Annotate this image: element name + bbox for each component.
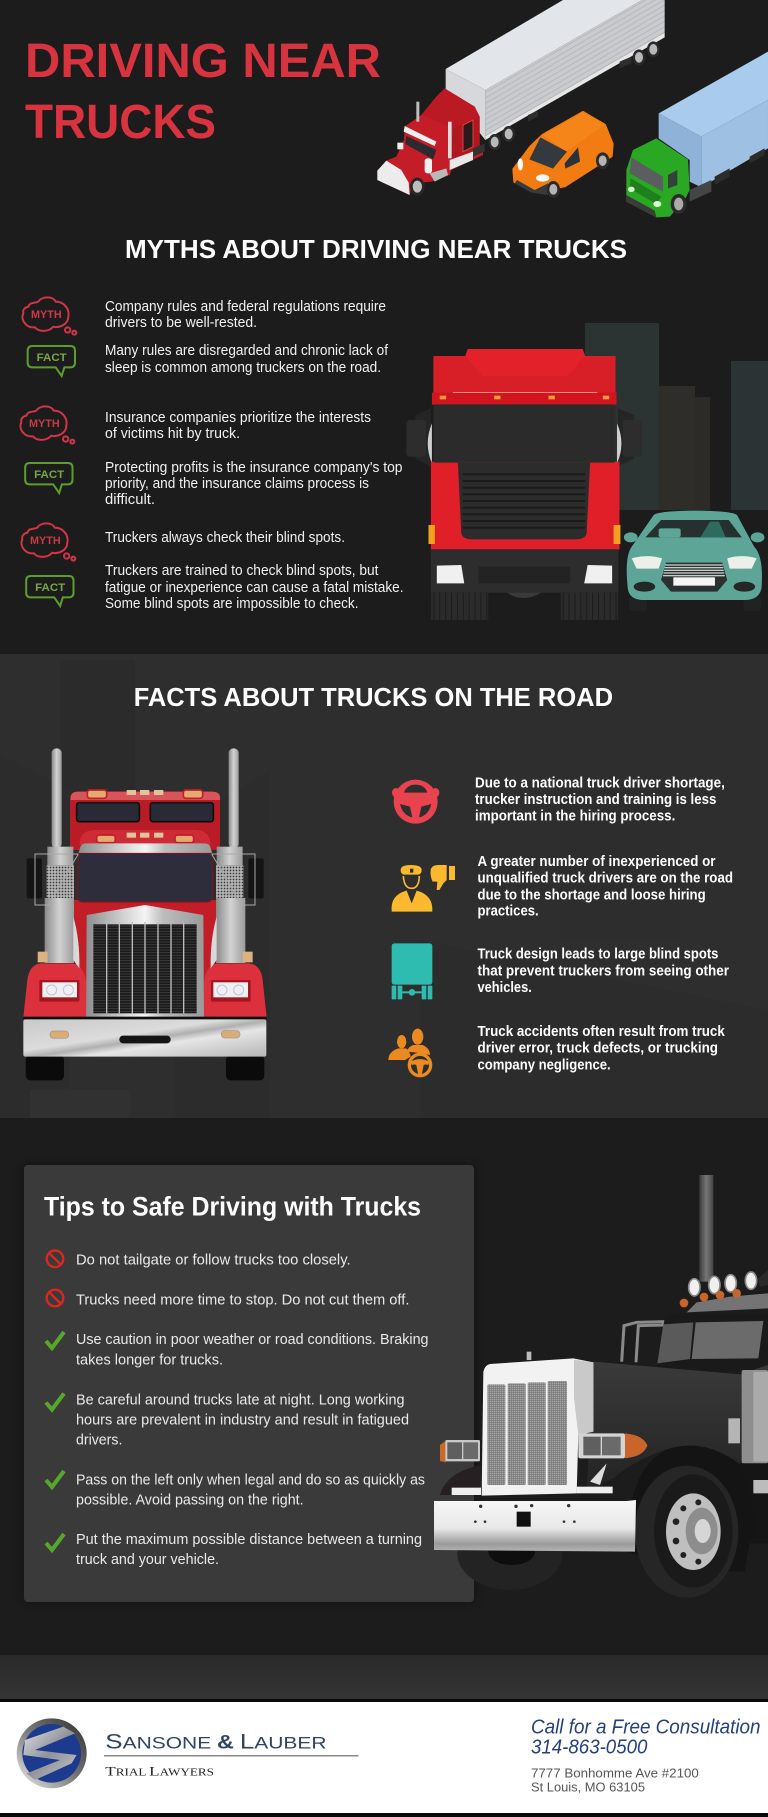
white trailer: [446, 0, 665, 150]
fact 1 text: Many rules are disregarded and chronic lack of: [105, 343, 389, 359]
myth icon 2: MYTH: [29, 418, 60, 430]
firm tagline: TRIAL LAWYERS: [105, 1763, 214, 1778]
fact text 1: [475, 775, 725, 825]
fact icon 3: FACT: [35, 582, 65, 594]
firm name: SANSONE & LAUBER: [105, 1730, 327, 1753]
icon: people and steering wheel: [388, 1029, 431, 1076]
panel: tips: [24, 1165, 474, 1602]
myth icon 2: [20, 406, 74, 444]
title: DRIVING NEAR: [25, 35, 381, 88]
fact text 3: vehicles.: [478, 980, 532, 996]
tip 5: Pass on the left only when legal and do so as quickly as: [76, 1472, 425, 1488]
icon: check 3: [46, 1471, 64, 1487]
tip 3: takes longer for trucks.: [76, 1352, 223, 1368]
tip 4: hours are prevalent in industry and result in fatigued: [76, 1412, 409, 1428]
myth 1 text: [105, 299, 386, 331]
tip 4: Be careful around trucks late at night. Long working: [76, 1392, 404, 1408]
myth 3 text: Truckers always check their blind spots.: [105, 530, 345, 546]
tip 6: [76, 1532, 422, 1568]
icon: check 1: [46, 1332, 64, 1348]
icon: check 2: [46, 1394, 64, 1410]
fact text 1: Due to a national truck driver shortage,: [475, 775, 725, 791]
fact text 4: Truck accidents often result from truck: [478, 1024, 726, 1040]
tip 3: Use caution in poor weather or road conditions. Braking: [76, 1332, 428, 1348]
icon: driver with thumbs down: [392, 865, 455, 912]
fact 2 text: [105, 460, 402, 508]
myth 2 text: [105, 410, 371, 442]
fact icon 1: [28, 346, 75, 376]
fact 2 text: Protecting profits is the insurance company's top: [105, 460, 402, 476]
fact text 2: A greater number of inexperienced or: [478, 854, 716, 870]
myth icon 3: [21, 523, 75, 561]
orange van: [514, 112, 612, 198]
myth 2 text: of victims hit by truck.: [105, 426, 240, 442]
tip 3: [76, 1332, 428, 1368]
tips heading: Tips to Safe Driving with Trucks: [44, 1191, 421, 1221]
heading: facts: FACTS ABOUT TRUCKS ON THE ROAD: [134, 682, 613, 712]
fact 2 text: difficult.: [105, 492, 155, 508]
icon: truck blind spot: [392, 943, 432, 999]
tip 6: Put the maximum possible distance between a turning: [76, 1532, 422, 1548]
address: St Louis, MO 63105: [531, 1780, 645, 1795]
myth icon 3: MYTH: [30, 535, 61, 547]
background: myths section: [0, 0, 768, 654]
fact text 2: due to the shortage and loose hiring: [478, 887, 706, 903]
tip 5: [76, 1472, 425, 1508]
myth 1 text: Company rules and federal regulations require: [105, 299, 386, 315]
background: footer band: [0, 1655, 768, 1699]
green truck with blue box: [626, 52, 768, 217]
consultation call: 314-863-0500: [531, 1736, 647, 1758]
fact text 4: company negligence.: [478, 1057, 611, 1073]
fact 3 text: fatigue or inexperience can cause a fatal mistake.: [105, 580, 404, 596]
fact icon 2: FACT: [34, 469, 64, 481]
fact icon 1: FACT: [37, 352, 67, 364]
myth 1 text: drivers to be well-rested.: [105, 315, 257, 331]
fact text 2: unqualified truck drivers are on the road: [478, 871, 733, 887]
icon: steering wheel: [392, 780, 439, 824]
illustration: three vehicles: [377, 0, 768, 217]
background: facts section: [0, 654, 768, 1118]
illustration: red truck front view: [406, 349, 642, 620]
tip 6: truck and your vehicle.: [76, 1552, 219, 1568]
myth 2 text: Insurance companies prioritize the interests: [105, 410, 371, 426]
tip 2: Trucks need more time to stop. Do not cut them off.: [76, 1293, 409, 1309]
fact text 2: practices.: [478, 903, 539, 919]
myth icon 1: [22, 297, 76, 335]
fact 3 text: Some blind spots are impossible to check.: [105, 596, 358, 612]
heading: myths: MYTHS ABOUT DRIVING NEAR TRUCKS: [125, 234, 627, 264]
illustration: red semi truck front: [23, 748, 267, 1080]
fact 1 text: sleep is common among truckers on the road.: [105, 360, 381, 376]
fact text 4: driver error, truck defects, or trucking: [478, 1041, 718, 1057]
fact 2 text: priority, and the insurance claims process is: [105, 476, 369, 492]
fact text 3: [478, 947, 729, 996]
illustration: green car: [624, 511, 764, 611]
consultation call: Call for a Free Consultation: [531, 1716, 760, 1738]
red truck cab: [377, 88, 485, 196]
consultation call: [531, 1716, 760, 1758]
fact text 1: trucker instruction and training is less: [475, 792, 716, 808]
title: TRUCKS: [25, 96, 216, 149]
tip 1: Do not tailgate or follow trucks too closely.: [76, 1253, 351, 1269]
fact icon 3: [26, 576, 73, 606]
fact text 3: Truck design leads to large blind spots: [478, 947, 718, 963]
address: 7777 Bonhomme Ave #2100: [531, 1765, 699, 1780]
fact 1 text: [105, 343, 389, 376]
tip 4: [76, 1392, 409, 1448]
buildings behind truck: [585, 323, 768, 510]
background: tips section: [0, 1118, 768, 1655]
icon: prohibited 2: [47, 1290, 63, 1306]
icon: check 4: [46, 1534, 64, 1550]
title: [25, 35, 381, 149]
tip 5: possible. Avoid passing on the right.: [76, 1492, 304, 1508]
fact 3 text: Truckers are trained to check blind spots, but: [105, 563, 378, 579]
tip 4: drivers.: [76, 1432, 122, 1448]
illustration: black truck: [434, 1175, 768, 1598]
fact text 4: [478, 1024, 726, 1073]
icon: prohibited 1: [47, 1250, 63, 1267]
fact 3 text: [105, 563, 404, 612]
fact text 1: important in the hiring process.: [475, 809, 675, 825]
footer: [0, 1699, 768, 1817]
fact icon 2: [25, 463, 72, 493]
logo: [17, 1718, 87, 1788]
fact text 2: [478, 854, 733, 919]
address: [531, 1765, 699, 1795]
fact text 3: that prevent truckers from seeing other: [478, 963, 729, 979]
myth icon 1: MYTH: [31, 309, 62, 321]
